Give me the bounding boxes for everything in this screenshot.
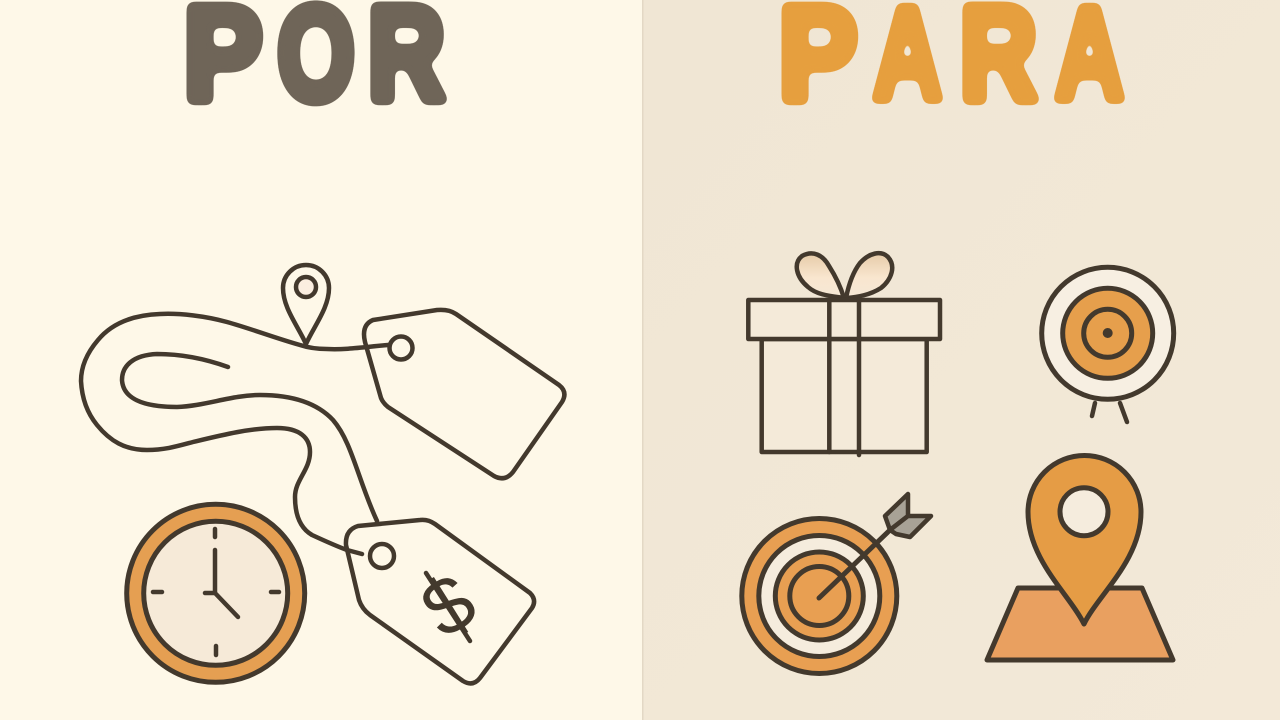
icon: clock	[127, 504, 305, 682]
icon: map with location pin	[987, 456, 1173, 660]
icon: target on stand	[1042, 267, 1174, 422]
icon: dollar price tag: $	[406, 556, 491, 655]
icon: blank price tag	[364, 310, 564, 478]
heading: PARA	[779, 0, 1125, 128]
icon: dollar price tag	[346, 520, 534, 683]
heading: POR	[184, 0, 445, 128]
winding string	[81, 314, 388, 554]
icon: small location pin	[283, 265, 329, 344]
panel: POR	[0, 0, 642, 720]
icon: gift box	[748, 253, 940, 455]
panel: PARA	[642, 0, 1280, 720]
illustration: winding path with pin, price tags and clock	[81, 265, 564, 683]
icon: target with arrow	[742, 494, 931, 674]
